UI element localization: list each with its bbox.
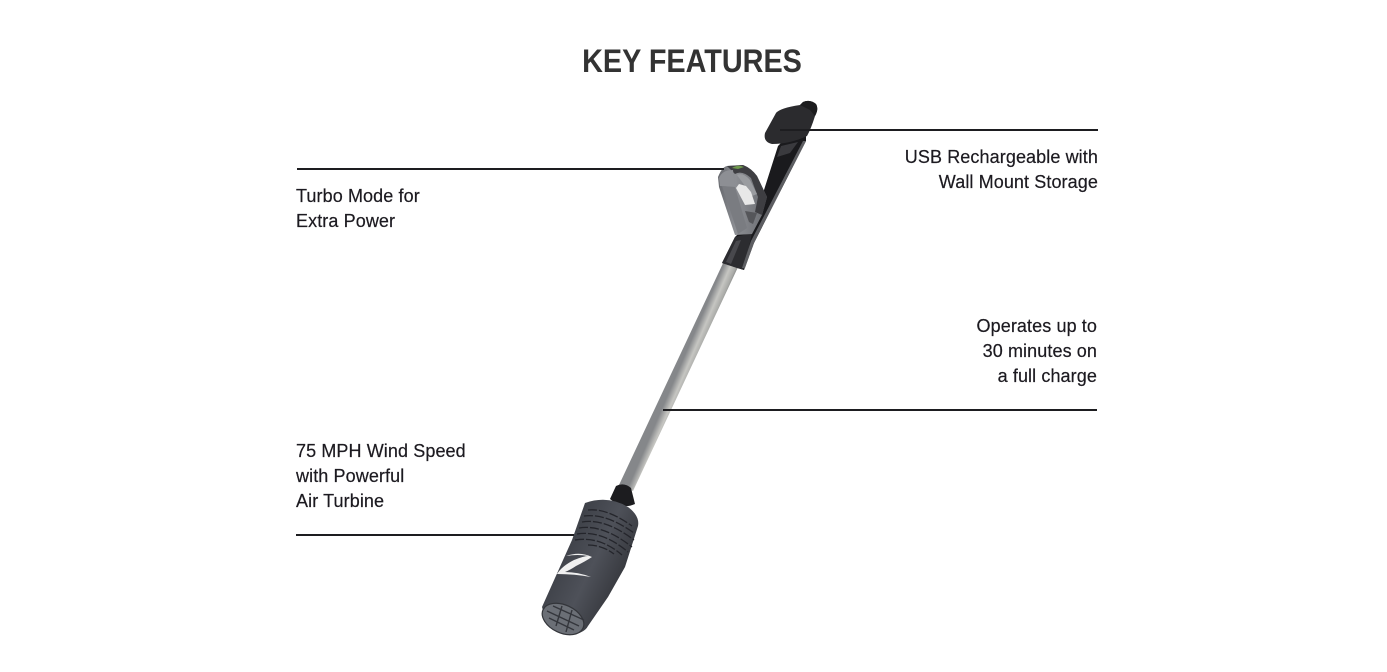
callout text: wind speed: 75 MPH Wind Speed (296, 441, 466, 461)
callout line: USB (780, 129, 1098, 131)
air grille (537, 597, 589, 641)
callout text: wind speed: Air Turbine (296, 491, 384, 511)
callout line: run time (663, 409, 1097, 411)
callout: USB rechargeable (780, 129, 1098, 192)
turbo trigger (718, 165, 767, 235)
callout line: wind speed (296, 534, 574, 536)
vent slots (575, 510, 634, 555)
callout text: USB (905, 147, 1098, 192)
callout text: wind speed (296, 441, 466, 511)
callout text: USB: Wall Mount Storage (939, 172, 1098, 192)
logo on turbine (557, 554, 592, 577)
callout text: turbo: Turbo Mode for (296, 186, 420, 206)
callout text: run time: a full charge (998, 366, 1097, 386)
callout: turbo mode (296, 168, 724, 231)
turbine collar (610, 484, 635, 506)
callout text: run time (977, 316, 1097, 386)
callout text: turbo: Extra Power (296, 211, 395, 231)
callout text: turbo (296, 186, 420, 231)
callout: wind speed (296, 441, 574, 536)
callout text: wind speed: with Powerful (296, 466, 404, 486)
turbine housing (542, 500, 638, 635)
callout line: turbo (297, 168, 724, 170)
callout text: USB: USB Rechargeable with (905, 147, 1098, 167)
title: KEY FEATURES (582, 43, 802, 79)
handle paddle (765, 101, 817, 144)
callout: run time (663, 316, 1097, 411)
handle arm (722, 136, 806, 270)
blower shaft (619, 259, 739, 491)
callout text: run time: 30 minutes on (983, 341, 1097, 361)
callout text: run time: Operates up to (977, 316, 1097, 336)
